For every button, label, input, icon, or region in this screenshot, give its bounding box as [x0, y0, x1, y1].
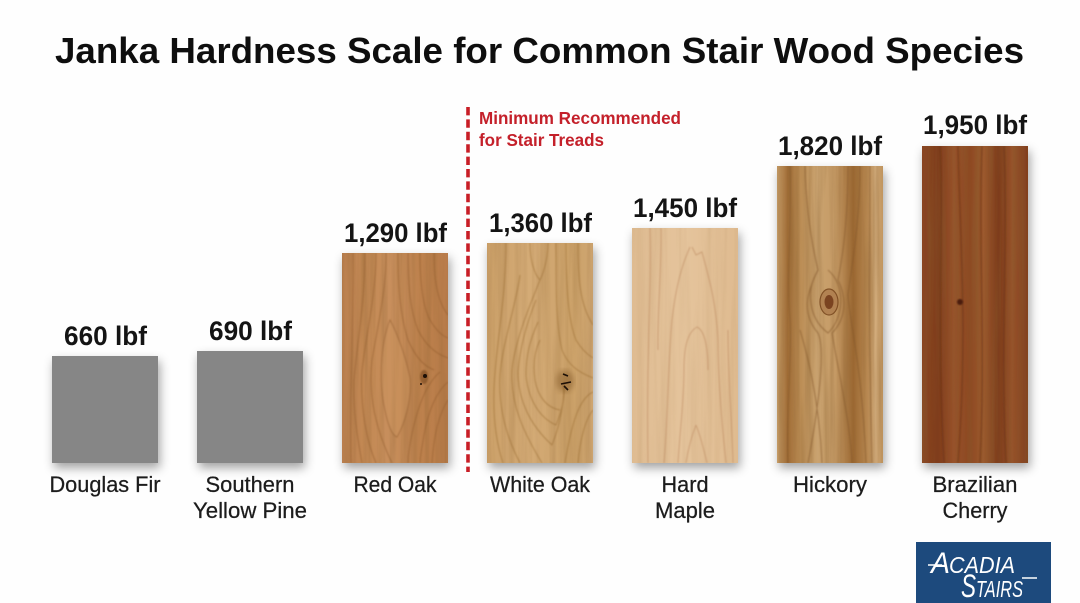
bar: Hickory — [777, 131, 883, 497]
threshold caption: for Stair Treads — [479, 130, 604, 150]
bar: White Oak — [487, 208, 593, 497]
label: Hard Maple: Hard — [662, 472, 708, 497]
label: Brazilian Cherry: Cherry — [942, 498, 1008, 523]
logo: Acadia Stairs: TAIRS — [976, 576, 1023, 602]
knot — [420, 370, 428, 384]
wood plank: White Oak — [487, 243, 593, 463]
label: Southern Yellow Pine: Yellow Pine — [193, 498, 307, 523]
logo: Acadia Stairs — [916, 542, 1051, 603]
label: Red Oak: Red Oak — [354, 472, 437, 497]
label: Brazilian Cherry — [932, 472, 1018, 523]
wood plank: Brazilian Cherry — [922, 146, 1028, 463]
gray block: Douglas Fir — [52, 356, 158, 463]
label: Brazilian Cherry: Brazilian — [932, 472, 1018, 497]
value: Southern Yellow Pine: 690 lbf — [209, 316, 293, 346]
threshold line: minimum recommended — [466, 107, 470, 472]
value: Red Oak: 1,290 lbf — [344, 218, 448, 248]
bar: Southern Yellow Pine — [193, 316, 307, 523]
label: Hickory: Hickory — [793, 472, 867, 497]
label: Southern Yellow Pine: Southern — [206, 472, 294, 497]
value: White Oak: 1,360 lbf — [489, 208, 593, 238]
label: Hard Maple — [655, 472, 715, 523]
wood plank: Red Oak — [342, 253, 448, 463]
knot — [556, 370, 574, 392]
logo: Acadia Stairs: CADIA — [949, 552, 1015, 578]
value: Douglas Fir: 660 lbf — [64, 321, 148, 351]
wood plank: Hard Maple — [632, 228, 738, 463]
label: Southern Yellow Pine — [193, 472, 307, 523]
value: Hickory: 1,820 lbf — [778, 131, 883, 161]
label: Douglas Fir: Douglas Fir — [50, 472, 160, 497]
threshold caption: Minimum Recommended — [479, 108, 681, 128]
value: Brazilian Cherry: 1,950 lbf — [923, 110, 1028, 140]
knot — [820, 289, 838, 315]
value: Hard Maple: 1,450 lbf — [633, 193, 738, 223]
bar: Douglas Fir — [50, 321, 160, 497]
title: Janka Hardness Scale for Common Stair Wood Species — [55, 30, 1024, 71]
wood plank: Hickory — [777, 166, 883, 463]
threshold caption — [479, 108, 681, 150]
bar: Brazilian Cherry — [922, 110, 1028, 523]
gray block: Southern Yellow Pine — [197, 351, 303, 463]
bar: Red Oak — [342, 218, 448, 497]
knot — [957, 299, 963, 305]
label: White Oak: White Oak — [490, 472, 591, 497]
bar: Hard Maple — [632, 193, 738, 523]
logo: Acadia Stairs: S — [961, 568, 976, 603]
label: Hard Maple: Maple — [655, 498, 715, 523]
logo: Acadia Stairs: A — [929, 547, 950, 580]
